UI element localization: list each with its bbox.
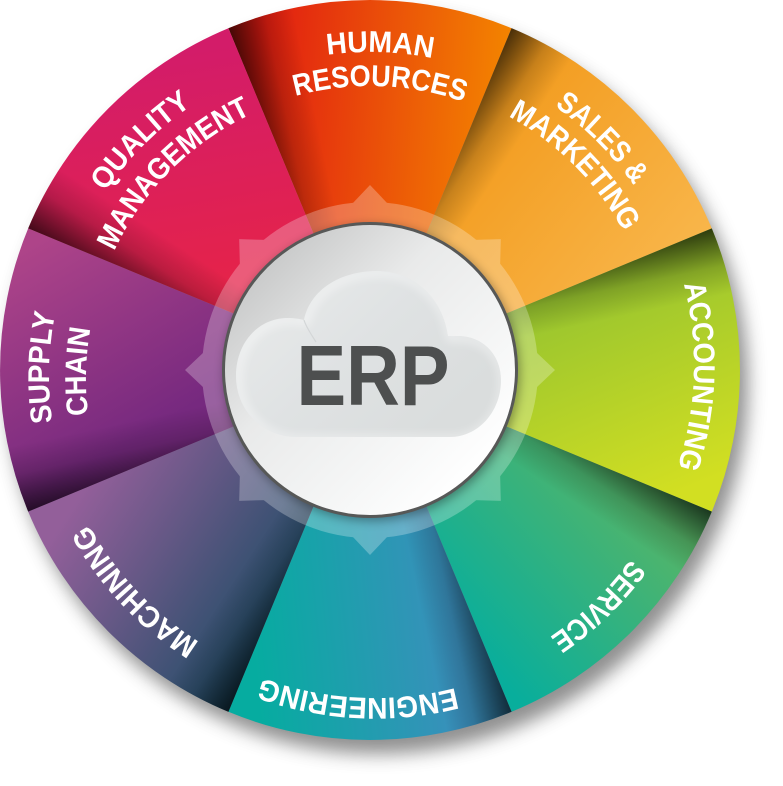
label: engineering: ENGINEERING [258, 680, 458, 719]
sector: service [270, 270, 732, 732]
label: quality management: QUALITY [92, 88, 186, 188]
sector: accounting [370, 228, 740, 512]
sector: engineering [228, 370, 512, 740]
icon: translucent gear ring [185, 185, 555, 555]
label: supply chain [28, 310, 90, 422]
label: sales and marketing: MARKETING [510, 99, 638, 228]
label: accounting: ACCOUNTING [680, 284, 715, 470]
title: ERP: ERP [296, 329, 450, 424]
label: supply chain: SUPPLY [28, 310, 54, 422]
panel: centre disc [224, 224, 520, 521]
sector: supply chain [0, 228, 370, 512]
sector: human resources [228, 0, 512, 370]
label: human resources: HUMAN [327, 31, 434, 58]
label: machining: MACHINING [74, 527, 198, 658]
sector: quality management [8, 8, 470, 470]
label: sales and marketing: SALES & [558, 92, 646, 185]
label: supply chain: CHAIN [65, 327, 90, 415]
label: human resources [292, 31, 467, 100]
label: human resources: RESOURCES [292, 65, 467, 100]
sector: machining [8, 270, 470, 732]
icon: cloud [236, 271, 503, 439]
sector: sales and marketing [270, 8, 732, 470]
label: quality management: MANAGEMENT [96, 96, 246, 250]
label: service: SERVICE [550, 562, 644, 653]
